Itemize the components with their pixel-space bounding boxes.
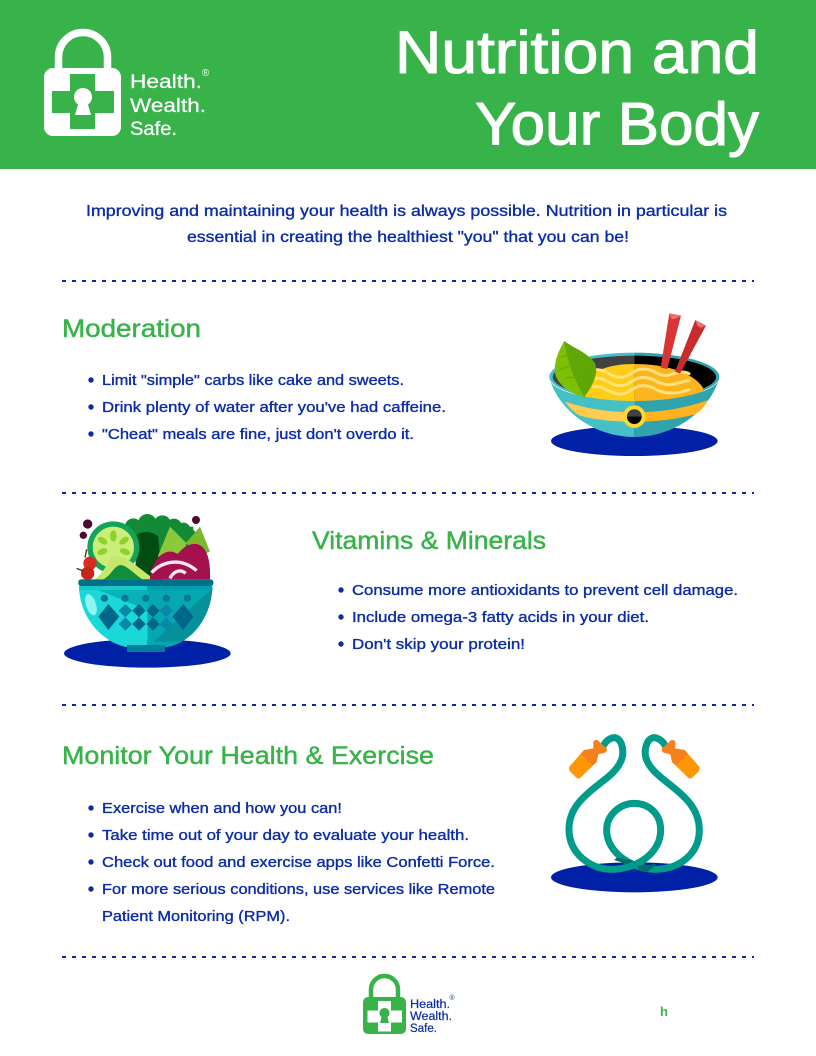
intro text xyxy=(86,203,727,246)
icon: noodle bowl xyxy=(549,313,719,456)
heading: monitor your health: Monitor Your Health & Exercise xyxy=(62,742,434,770)
panel: vitamins and minerals xyxy=(64,514,738,668)
header band xyxy=(0,0,816,169)
bullet list: moderation: "Cheat" meals are fine, just don't overdo it. xyxy=(102,426,414,443)
panel: moderation xyxy=(62,313,719,456)
footer logo: Safe. xyxy=(410,1023,437,1035)
bullet list: monitor: Patient Monitoring (RPM). xyxy=(102,908,290,925)
bullet list: vitamins xyxy=(338,582,738,653)
title: Nutrition and xyxy=(395,19,759,86)
heading: moderation: Moderation xyxy=(62,315,201,343)
intro text: Improving and maintaining your health is always possible. Nutrition in particular is xyxy=(86,203,727,220)
icon: salad bowl xyxy=(64,514,231,668)
footer logo: ® xyxy=(449,994,455,1002)
footer letter: h xyxy=(660,1004,668,1019)
left handle xyxy=(569,740,607,778)
bullet list: vitamins: Include omega-3 fatty acids in your diet. xyxy=(352,609,649,626)
bullet list: moderation: Limit "simple" carbs like cake and sweets. xyxy=(102,372,404,389)
logo: padlock with cross: Safe. xyxy=(130,119,177,140)
bullet list: monitor: For more serious conditions, use services like Remote xyxy=(102,881,495,898)
logo: padlock with cross xyxy=(44,33,210,140)
title: Your Body xyxy=(475,90,759,158)
bullet list: monitor xyxy=(88,800,495,925)
bullet list: vitamins: Consume more antioxidants to prevent cell damage. xyxy=(352,582,738,599)
bullet list: vitamins: Don't skip your protein! xyxy=(352,636,525,653)
logo: padlock with cross: Wealth. xyxy=(130,96,206,117)
right handle xyxy=(662,740,700,778)
bullet list: monitor: Exercise when and how you can! xyxy=(102,800,342,817)
intro text: essential in creating the healthiest "you" that you can be! xyxy=(187,229,629,246)
icon: jump rope xyxy=(551,738,718,892)
footer logo xyxy=(363,976,455,1035)
bullet list: monitor: Check out food and exercise apps like Confetti Force. xyxy=(102,854,495,871)
logo: padlock with cross: Health. xyxy=(130,72,202,93)
bullet list: moderation: Drink plenty of water after you've had caffeine. xyxy=(102,399,446,416)
title xyxy=(395,19,759,158)
footer logo: Health. xyxy=(410,999,450,1011)
footer logo: Wealth. xyxy=(410,1011,452,1023)
heading: vitamins and minerals: Vitamins & Minerals xyxy=(312,527,546,555)
logo: padlock with cross: ® xyxy=(202,68,210,79)
panel: monitor your health and exercise xyxy=(62,738,718,925)
bullet list: monitor: Take time out of your day to evaluate your health. xyxy=(102,827,469,844)
bullet list: moderation xyxy=(88,372,446,443)
